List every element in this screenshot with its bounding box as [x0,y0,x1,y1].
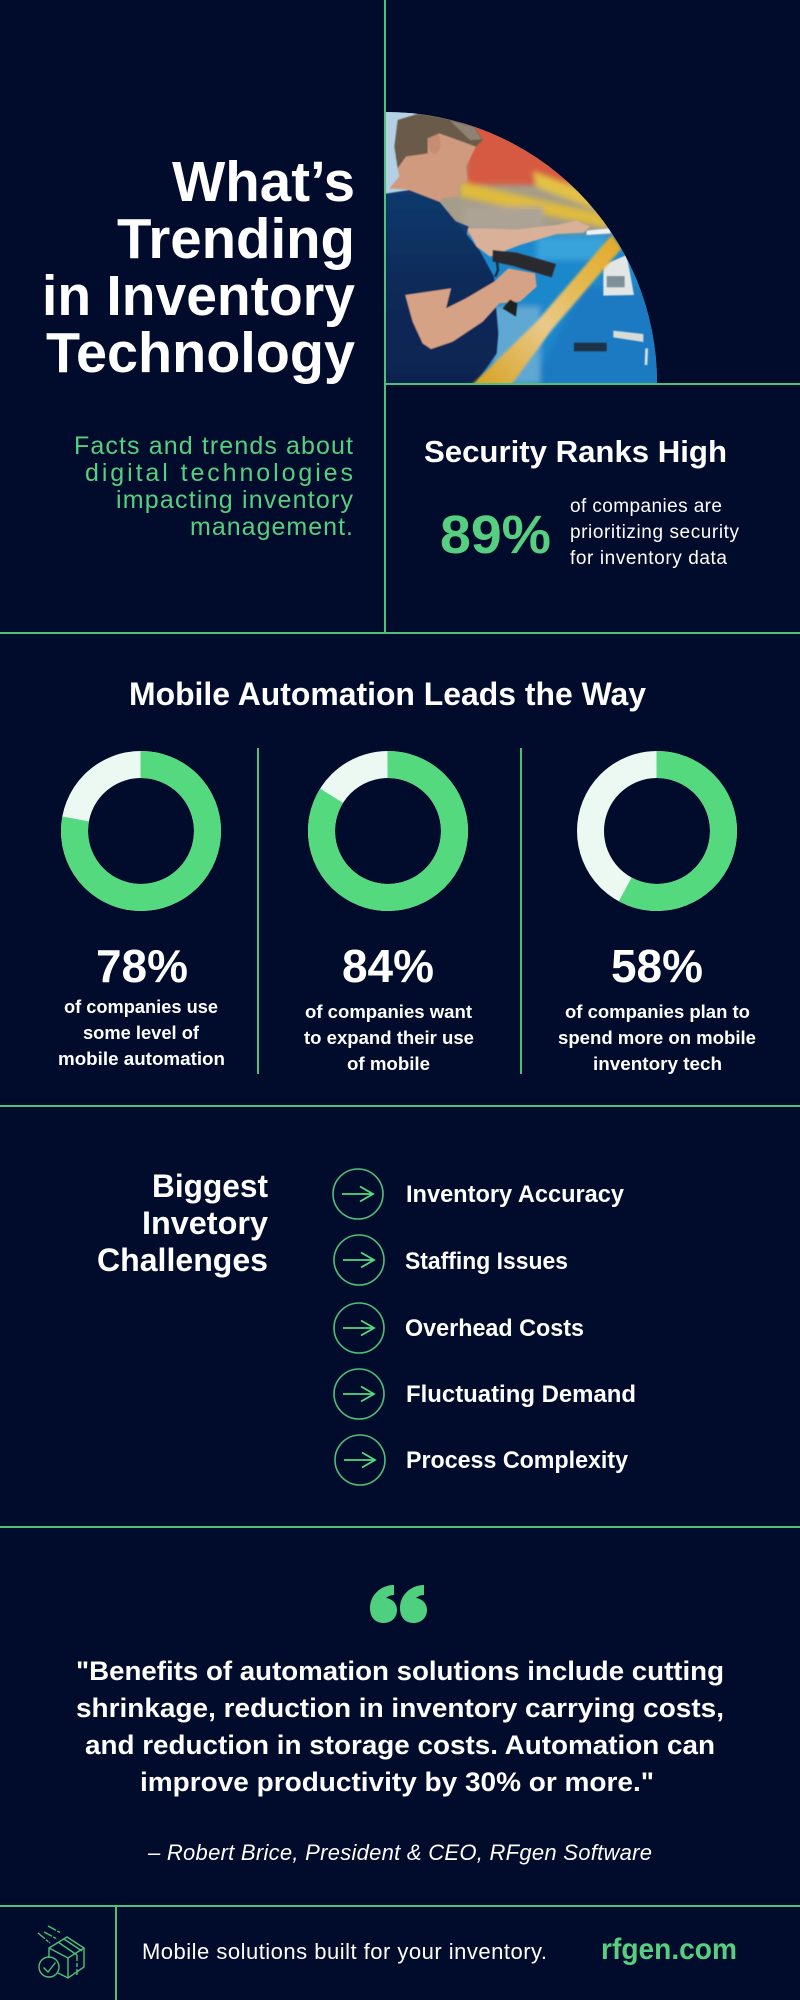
stat: 78% [96,940,188,992]
description [558,1002,756,1074]
security description: of companies are [570,496,722,517]
heading: biggest challenges: Challenges [97,1242,268,1278]
title: Trending [117,207,355,271]
icon: package with check [38,1926,84,1978]
subtitle: digital technologies [85,459,353,487]
safety rail [470,235,622,387]
item: fluctuating demand: Fluctuating Demand [406,1381,636,1408]
footer url: rfgen.com [601,1933,737,1966]
ear [428,134,440,154]
panel: 58 percent [558,764,756,1074]
description: to expand their use [304,1028,474,1048]
donut chart 78% [74,764,208,898]
heading: biggest challenges [97,1168,268,1278]
near arm and hand [405,268,537,349]
item: inventory accuracy: Inventory Accuracy [406,1181,625,1208]
quote text: shrinkage, reduction in inventory carrying costs, [76,1693,724,1723]
hair [394,113,483,168]
stat: 84% [342,940,434,992]
shirt [383,190,498,387]
subtitle [74,432,354,541]
item: inventory accuracy [333,1169,625,1219]
footer tagline: Mobile solutions built for your inventory. [142,1939,547,1964]
donut chart 84% [322,764,454,898]
security description [570,496,740,569]
stat: 58% [611,940,703,992]
description: inventory tech [593,1054,722,1074]
item: process complexity [335,1435,629,1485]
description: mobile automation [58,1049,225,1069]
heading: biggest challenges: Invetory [142,1205,268,1241]
scanner [493,250,556,277]
item: fluctuating demand [334,1369,636,1419]
title [42,150,355,385]
description: of companies use [64,997,218,1017]
quote text: and reduction in storage costs. Automation can [85,1730,715,1760]
photo: worker scanning inventory [380,103,663,387]
title: What’s [172,150,355,214]
stat: 89%: 89% [440,505,551,565]
description [58,997,225,1069]
item: overhead costs [334,1303,584,1353]
description: of companies plan to [565,1002,750,1022]
attribution: – Robert Brice, President & CEO, RFgen Software [147,1840,652,1865]
item: overhead costs: Overhead Costs [405,1315,584,1342]
panel: 84 percent [304,764,474,1074]
security description: for inventory data [570,548,727,569]
icon: quotation mark [370,1585,427,1623]
security description: prioritizing security [570,522,740,543]
description: of companies want [305,1002,472,1022]
quote text: "Benefits of automation solutions include cutting [76,1656,724,1686]
face and neck [389,133,476,202]
description: spend more on mobile [558,1028,756,1048]
description: some level of [83,1023,200,1043]
donut chart 58% [590,764,724,898]
panel: 78 percent [58,764,225,1069]
list: challenges [333,1169,636,1485]
description: of mobile [347,1054,430,1074]
subtitle: impacting inventory [116,486,354,514]
heading: mobile automation: Mobile Automation Leads the Way [129,676,646,712]
quote text [76,1656,724,1797]
shipping label [603,255,634,296]
quote text: improve productivity by 30% or more." [140,1767,654,1797]
subtitle: Facts and trends about [74,432,353,460]
far sleeve [455,220,470,234]
heading: biggest challenges: Biggest [152,1168,268,1204]
item: staffing issues [334,1235,568,1285]
far arm [467,221,590,257]
subtitle: management. [190,513,353,541]
item: staffing issues: Staffing Issues [405,1248,568,1275]
title: in Inventory [42,264,355,328]
security heading: Security Ranks High [424,434,727,469]
title: Technology [46,321,355,385]
panel: security [424,434,740,569]
description [304,1002,474,1074]
item: process complexity: Process Complexity [406,1447,629,1474]
